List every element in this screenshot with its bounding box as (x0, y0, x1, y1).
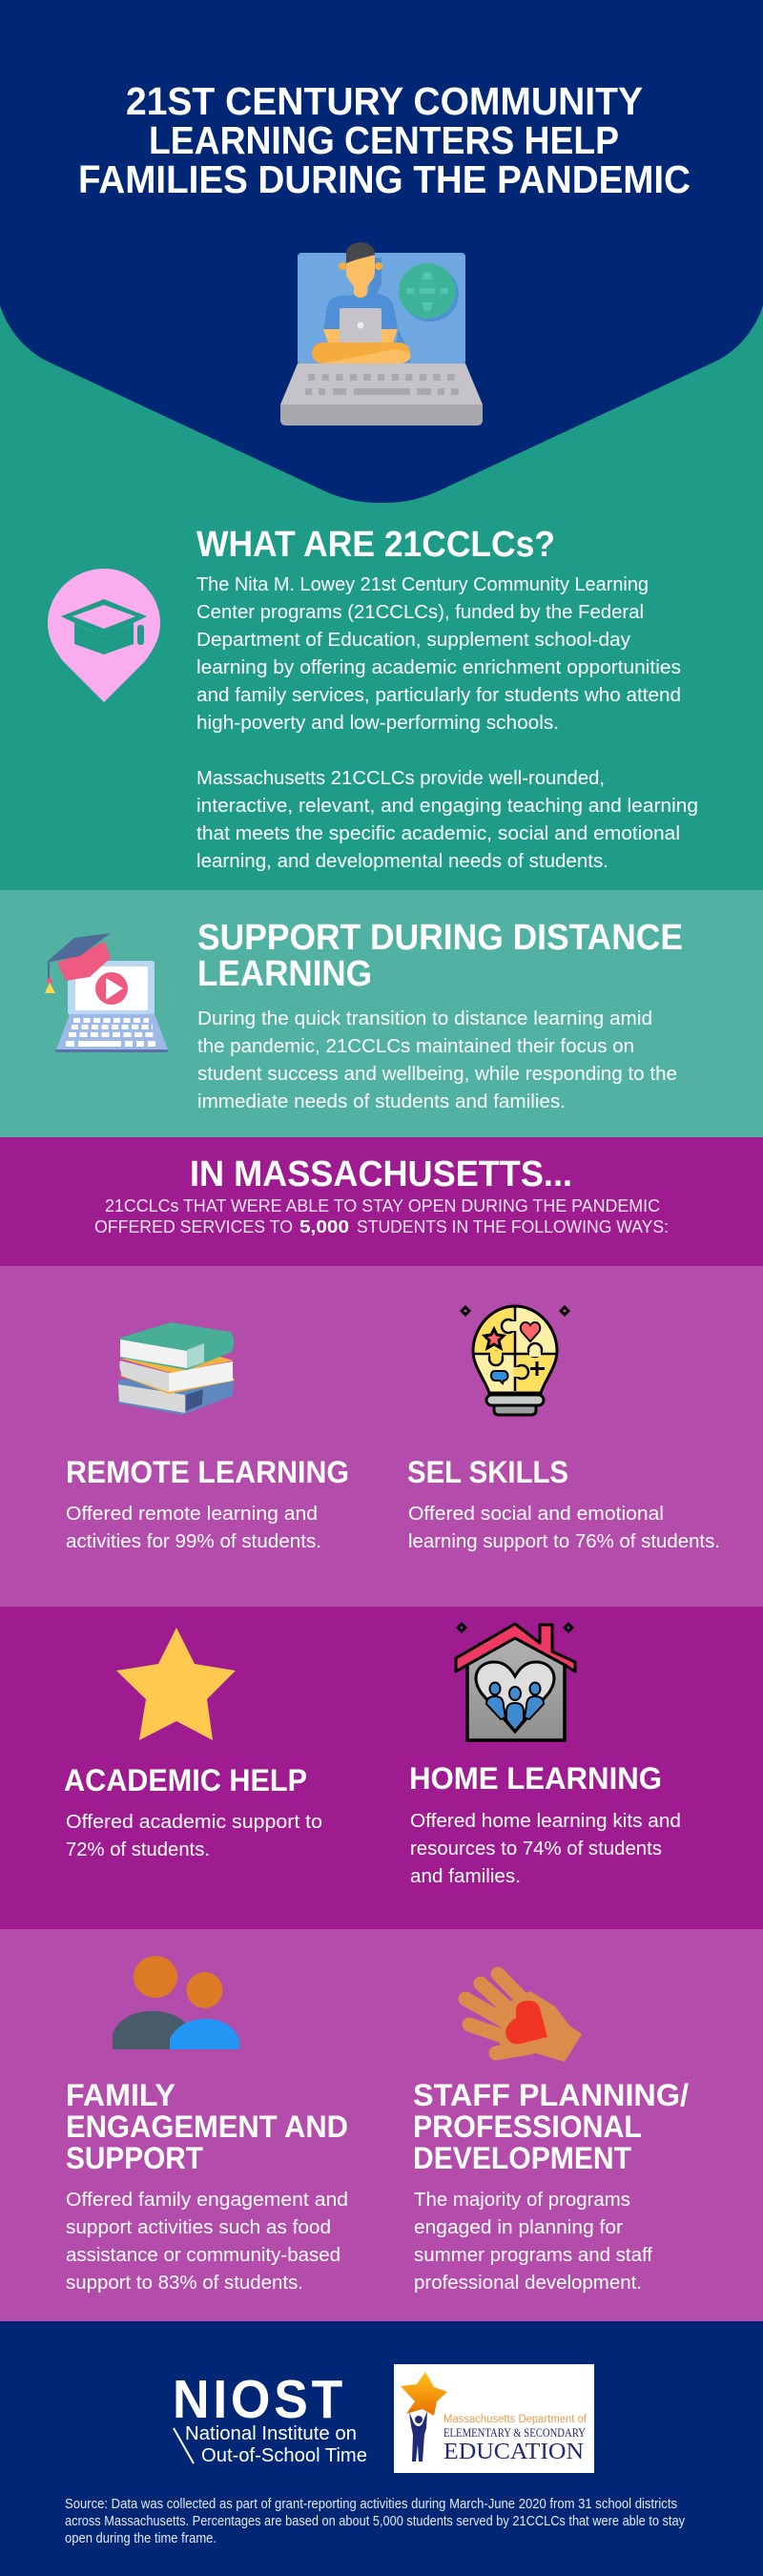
text block: services intro (94, 1195, 669, 1236)
text block: program description: Center programs (21CCLCs), funded by the Federal (196, 602, 644, 623)
text block: source note: open during the time frame. (65, 2531, 217, 2546)
icon: puzzle light bulb (460, 1302, 570, 1415)
heading: support during distance learning: SUPPORT DURING DISTANCE (197, 918, 683, 958)
text block: program description: learning by offering academic enrichment opportunities (196, 657, 681, 678)
icon: laptop with graduation cap (45, 933, 168, 1052)
text block: services intro: OFFERED SERVICES TO (94, 1216, 293, 1236)
text block: program description: and family services, particularly for students who attend (196, 685, 681, 706)
card: family engagement and support: ENGAGEMENT AND (66, 2109, 348, 2144)
card: family engagement and support: support activities such as food (66, 2217, 331, 2238)
text block: distance learning (197, 1008, 677, 1112)
card: SEL skills: SEL SKILLS (407, 1455, 568, 1489)
icon: graduation cap pin (48, 569, 160, 702)
text block: source note: Source: Data was collected as part of grant-reporting activities during March-June 2020 from 31 school districts (65, 2497, 677, 2512)
logo: Massachusetts Department of Elementary and Secondary Education: Massachusetts Department of (443, 2414, 588, 2425)
card: home learning: HOME LEARNING (409, 1761, 662, 1796)
card: remote learning (66, 1455, 349, 1552)
heading: what are 21CCLCs: WHAT ARE 21CCLCs? (196, 525, 555, 565)
card: home learning: and families. (410, 1866, 521, 1887)
card: academic help: Offered academic support to (66, 1812, 322, 1833)
card: remote learning: Offered remote learning and (66, 1504, 318, 1525)
panel: footer (0, 2321, 763, 2576)
card: home learning (409, 1761, 681, 1887)
title: LEARNING CENTERS HELP (149, 118, 619, 162)
logo: NIOST: National Institute on (185, 2423, 357, 2444)
card: home learning: resources to 74% of students (410, 1839, 662, 1859)
card: staff planning and professional development: STAFF PLANNING/ (413, 2078, 689, 2112)
card: academic help (64, 1763, 322, 1860)
card: remote learning: activities for 99% of students. (66, 1531, 321, 1552)
icon: hand holding heart (465, 1974, 582, 2062)
text block: source note: across Massachusetts. Percentages are based on about 5,000 students served by 21CCLCs that were able to stay (65, 2514, 686, 2529)
card: family engagement and support: Offered family engagement and (66, 2190, 348, 2211)
logo: NIOST: Out-of-School Time (201, 2445, 367, 2466)
panel: in Massachusetts (0, 1137, 763, 1266)
panel: third row of services (0, 1929, 763, 2321)
card: academic help: 72% of students. (66, 1839, 210, 1860)
heading: in Massachusetts: IN MASSACHUSETTS... (190, 1154, 572, 1195)
card: remote learning: REMOTE LEARNING (66, 1455, 349, 1489)
card: SEL skills: learning support to 76% of students. (408, 1531, 720, 1552)
card: family engagement and support: support to 83% of students. (66, 2273, 303, 2294)
icon: two people (113, 1956, 239, 2049)
text block: distance learning: the pandemic, 21CCLCs maintained their focus on (197, 1036, 634, 1057)
logo: Massachusetts Department of Elementary and Secondary Education (394, 2364, 594, 2473)
card: staff planning and professional development (413, 2078, 689, 2294)
card: family engagement and support: SUPPORT (66, 2141, 203, 2175)
logo: NIOST: NIOST (173, 2369, 346, 2430)
text block: Massachusetts programs: learning, and developmental needs of students. (196, 851, 608, 872)
text block: program description (196, 574, 681, 734)
panel: what are 21CCLCs (0, 509, 763, 890)
card: home learning: Offered home learning kits and (410, 1811, 681, 1832)
panel: header (0, 0, 763, 509)
text block: source note (65, 2497, 686, 2546)
text block: services intro: 5,000 (299, 1216, 349, 1236)
card: staff planning and professional development: PROFESSIONAL (413, 2109, 642, 2144)
text block: distance learning: During the quick transition to distance learning amid (197, 1008, 652, 1029)
card: family engagement and support: assistance or community-based (66, 2245, 340, 2266)
text block: services intro: STUDENTS IN THE FOLLOWING WAYS: (357, 1216, 669, 1236)
panel: second row of services (0, 1607, 763, 1929)
icon: house with family heart (456, 1622, 575, 1740)
heading: support during distance learning: LEARNING (197, 954, 372, 994)
card: SEL skills (407, 1455, 720, 1552)
text block: program description: Department of Education, supplement school-day (196, 630, 630, 651)
panel: first row of services (0, 1266, 763, 1607)
text block: Massachusetts programs: interactive, relevant, and engaging teaching and learning (196, 796, 698, 817)
card: family engagement and support (66, 2078, 348, 2294)
card: family engagement and support: FAMILY (66, 2078, 175, 2112)
icon: person on laptop (280, 242, 483, 426)
text block: distance learning: immediate needs of students and families. (197, 1091, 566, 1112)
card: staff planning and professional development: engaged in planning for (414, 2217, 623, 2238)
icon: star (116, 1628, 236, 1740)
title: 21ST CENTURY COMMUNITY (126, 79, 643, 123)
card: staff planning and professional development: summer programs and staff (414, 2245, 652, 2266)
card: staff planning and professional development: DEVELOPMENT (413, 2141, 631, 2175)
card: academic help: ACADEMIC HELP (64, 1763, 307, 1797)
logo: NIOST (173, 2369, 367, 2466)
card: staff planning and professional development: professional development. (414, 2273, 642, 2294)
panel: support during distance learning (0, 890, 763, 1137)
logo: Massachusetts Department of Elementary and Secondary Education: ELEMENTARY & SECONDARY (443, 2426, 586, 2440)
icon: stack of books (118, 1322, 235, 1415)
text block: Massachusetts programs (196, 768, 698, 872)
text block: program description: The Nita M. Lowey 21st Century Community Learning (196, 574, 649, 595)
logo: Massachusetts Department of Elementary and Secondary Education: EDUCATION (443, 2439, 584, 2464)
text block: Massachusetts programs: that meets the specific academic, social and emotional (196, 823, 680, 844)
title: FAMILIES DURING THE PANDEMIC (78, 157, 691, 201)
card: staff planning and professional development: The majority of programs (414, 2190, 630, 2211)
heading: support during distance learning (197, 918, 683, 994)
text block: program description: high-poverty and low-performing schools. (196, 713, 559, 734)
title (78, 79, 691, 201)
text block: Massachusetts programs: Massachusetts 21CCLCs provide well-rounded, (196, 768, 605, 789)
card: SEL skills: Offered social and emotional (408, 1504, 664, 1525)
text block: services intro: 21CCLCs THAT WERE ABLE TO STAY OPEN DURING THE PANDEMIC (105, 1195, 660, 1215)
text block: distance learning: student success and wellbeing, while responding to the (197, 1064, 677, 1085)
